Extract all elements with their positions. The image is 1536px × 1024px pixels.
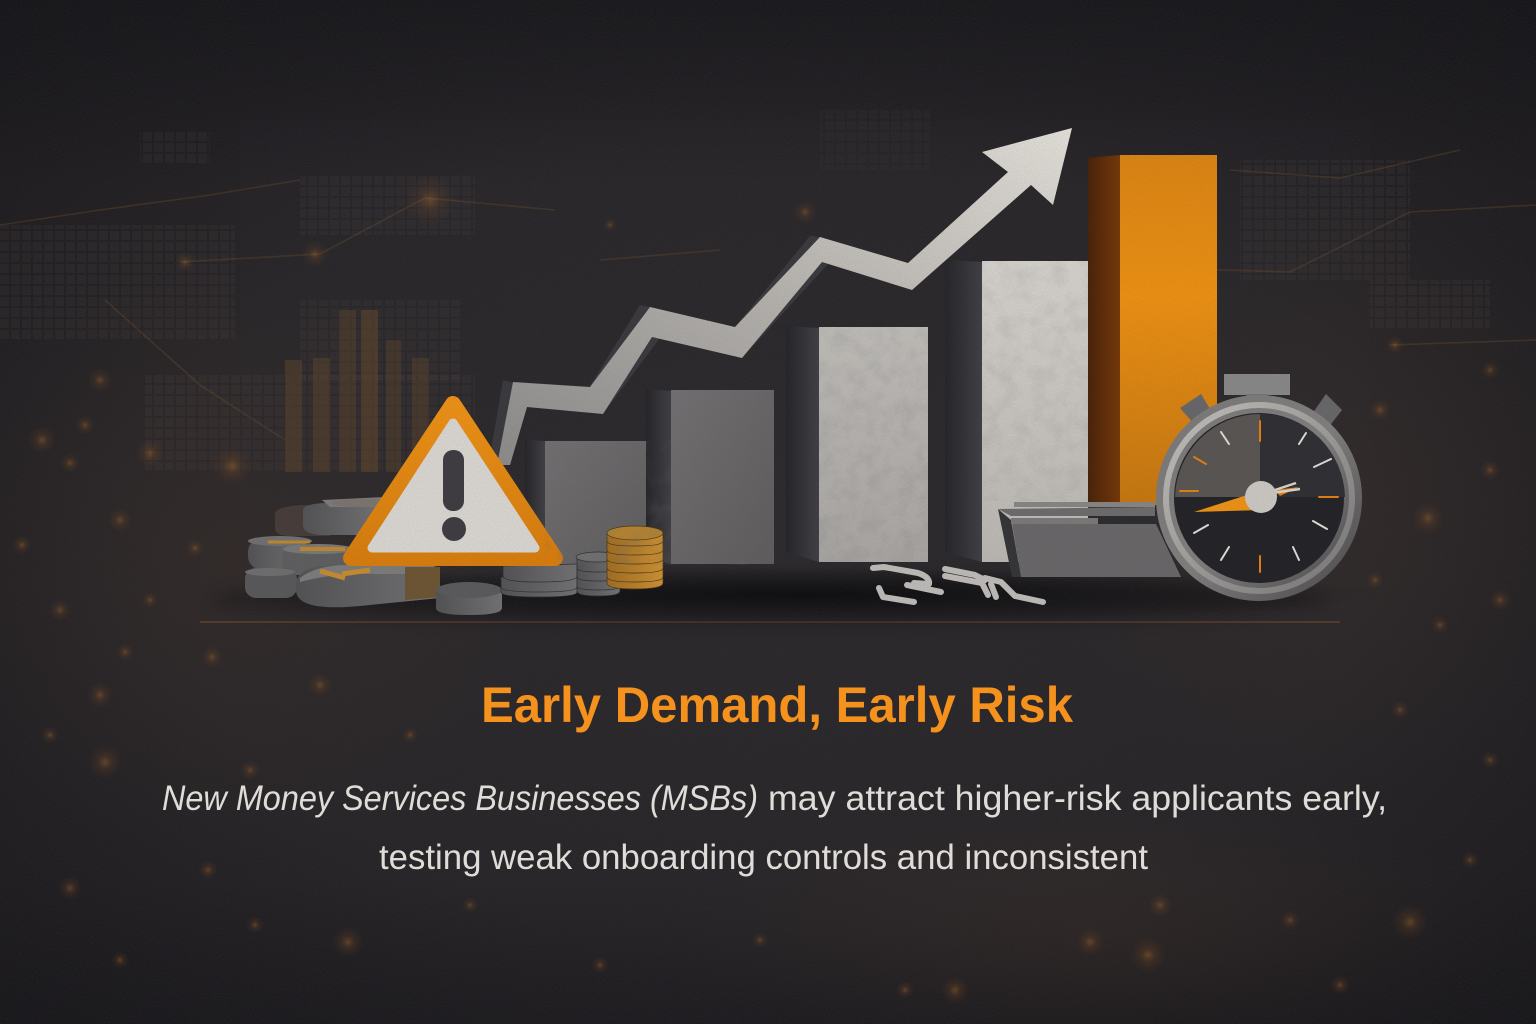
tick marks — [1180, 421, 1338, 572]
title: Early Demand, Early Risk — [481, 677, 1073, 733]
orange hand — [1194, 494, 1262, 512]
bar 2 — [646, 389, 774, 564]
bar 3 — [786, 326, 928, 562]
line 1, italic part: New Money Services Businesses (MSBs) — [162, 779, 758, 818]
floor shadow under chart — [210, 567, 1390, 623]
coin piles — [245, 497, 663, 615]
rising arrow — [489, 128, 1072, 465]
broken chain links — [873, 567, 1043, 602]
dial — [1174, 413, 1344, 583]
document folder — [998, 502, 1181, 577]
left coin pile — [245, 497, 440, 607]
texture overlay — [240, 120, 1370, 620]
bar chart — [525, 155, 1217, 565]
exclamation mark — [442, 450, 466, 541]
case — [1156, 395, 1362, 601]
small silver stack — [576, 552, 620, 596]
bar 1 — [525, 440, 647, 565]
single coin — [436, 582, 502, 615]
hub — [1245, 481, 1277, 513]
crown and side buttons — [1180, 374, 1342, 428]
bar 4 — [945, 260, 1088, 562]
stopwatch icon — [1156, 374, 1362, 601]
bar 5, orange — [1088, 155, 1217, 505]
silver stack — [501, 564, 577, 597]
line 2: testing weak onboarding controls and inconsistent — [379, 838, 1148, 877]
body text — [162, 779, 1387, 877]
line 1, roman part: may attract higher-risk applicants early, — [768, 779, 1387, 818]
warning triangle icon — [351, 404, 555, 558]
gold coin stack — [607, 526, 663, 589]
